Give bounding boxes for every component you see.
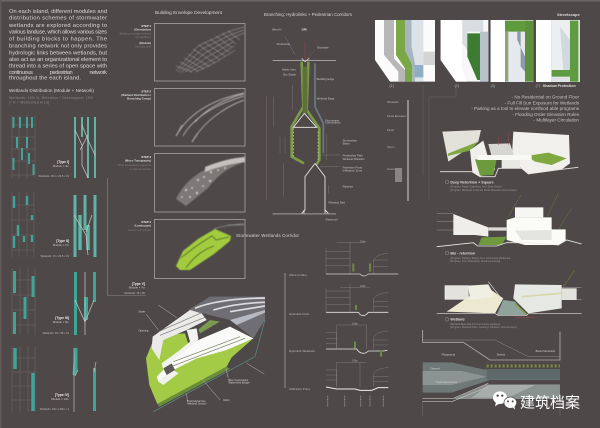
section: bio-retention [437,193,582,263]
intro text block [8,9,107,82]
iso labels: Rain [223,398,230,402]
section key rail [285,273,315,391]
step 4 label: STEP 4 [141,220,151,224]
type II caption: [Type II] [56,239,69,243]
step 1 label: the landform [135,35,152,39]
design rules list: - Multilayer Circulation [534,118,579,122]
heading: branching hydrolinks: Branching: Hydrolinks + Pedestrian Corridors [264,12,353,17]
section: deep retention + square [440,130,578,192]
caption: [Wetland Bank Site For Community Gardens] [450,323,500,326]
type IV module grid [12,346,35,412]
panel: envelope step 3 [118,154,245,212]
panel: wetlands type I [12,115,95,178]
type II caption: Module × 7m [53,243,70,247]
streetscape labels [389,84,576,88]
isometric building view [138,297,265,412]
step 2 label: STEP 2 [141,90,151,94]
site outline [147,297,265,412]
scale labels: Flood Elevated [387,114,406,118]
section row 1 [326,240,398,276]
type IV caption [40,393,70,411]
corridor labels: Pedestrian [277,42,291,46]
sections on right [437,130,582,263]
panel: envelope step 2 [121,88,245,146]
heading: wetlands distribution [9,88,94,104]
intro text block: continuous pedestrian network [9,70,107,76]
streetscape panels [375,20,580,88]
corridor labels: Bio Swale [283,73,296,77]
step 3 label: to light and water [130,167,151,171]
type I module grid [12,115,35,178]
caption: Wetland [450,318,464,322]
flood plan diagram [422,330,560,416]
streetscape labels: (7) [536,84,540,88]
streetscape labels: (2) [455,84,459,88]
step 1 label: Building envelope follows [120,32,152,36]
step 2 label: (Wetland Distribution / [121,93,151,97]
intro text block: branching network not only provides [9,43,107,49]
intro text block: On each island, different modules and [9,9,107,15]
rail labels: Wind corridor [289,273,307,277]
section row 4: 0.5m [352,359,359,363]
callout arrows [146,305,264,402]
heading: wetlands distribution: Wetlands Distribution (Module + Network) [9,88,94,93]
streetscape image 3 [491,20,533,82]
caption: Bio - retention [450,251,475,255]
corridor labels: Bioswale [317,46,329,50]
white building bars [152,310,253,385]
iso labels: Wetland Section [187,402,207,406]
iso labels: Solar [138,309,145,313]
corridor labels: Basin [343,141,350,145]
scale labels [387,100,406,171]
type I caption: Wetlands: 15m x 23.5 x 15 [38,174,70,178]
watermark: wechat icon [493,391,517,410]
intro text block: throughout the each island. [9,76,81,82]
wetland section [437,270,582,329]
type II caption [40,239,70,258]
corridor labels: Wind In [272,28,282,32]
corridor labels [272,28,365,222]
design rules list: - Full Fill Sun Exposure for Wetlands [505,100,580,106]
type IV caption: Module × 13m [51,397,70,401]
corridor sections [326,240,398,407]
caption: [Program: Wetlands & Streets Flood Retention Ground plan] [450,189,517,192]
caption: [Program: Wetland Plant, Learning, Filtration, Ground Layer] [450,326,517,329]
corridor labels: Building Edge [317,77,335,81]
intro text block: various landuse, which allows various sizes [9,30,107,36]
streetscape labels: (3) [491,84,495,88]
caption: Deep Retention + Square [450,180,494,184]
site lines [273,61,336,214]
step 3 perforated roof [176,157,245,206]
step 1 label: (Orientation) [134,28,151,32]
step 2 frame [154,88,245,146]
section: wetland + plan [422,270,582,416]
type IV caption: Wetlands: 18m x 28m x 4 [40,407,70,411]
type I caption [38,160,70,178]
type I caption: Module × 4m [53,164,70,168]
streetscape image 2 [441,20,488,82]
step 4 label: Green roof system [128,228,152,232]
corridor labels: Pedestrian Path [343,154,363,158]
corridor labels: Infiltration Zone [343,169,363,173]
flood plan diagram: Hydrological Zone [436,380,458,384]
type I network [75,117,95,178]
step 1 label [120,24,152,48]
type III caption [43,316,70,335]
corridor labels: Stormwater [325,118,340,122]
caption: [Program: Retail, Gathering, Ped. Deep Water] [450,186,502,189]
flood plan diagram: Bank Ownership [536,349,556,353]
iso labels: Blue Corporation [228,378,249,382]
type II network [74,195,95,257]
watermark text: 建筑档案 [520,394,580,412]
type III caption: Wetlands: 18 x 58 x 10 [43,331,70,335]
water line [315,63,323,153]
step 4 green roof [176,224,244,270]
step 1 mesh roof [176,27,244,72]
design rules list: - Parking as a tool to elevate nonflood able programs [471,106,580,111]
design rules list: - No Residential on Ground Floor [512,94,579,100]
rail labels [289,273,315,391]
step 4 frame [154,220,245,278]
caption [445,251,511,263]
step 3 frame [154,154,245,212]
intro text block: distribution schemes of stormwater [9,16,107,22]
branching corridor diagram [267,28,365,222]
panel: envelope step 1 [120,24,245,81]
caption: [Program: Ped. Pedestrian, Flooding Ground] [450,260,500,263]
design rules list [471,94,580,122]
rail labels: Infiltration Point [289,387,310,391]
caption [445,317,517,329]
rail labels: Hydrolink Wetlands [289,349,315,353]
panel: type V frame and caption: [Type V] [132,282,145,286]
iso labels: Opening [138,329,149,333]
panel: wetlands type IV [12,346,96,412]
intro text block: also act as an organizational element to [9,57,107,63]
corridor labels: Conveyance [325,120,341,124]
intro text block: wetlands are explored according to [8,23,107,29]
step 1 label: (Module) [139,41,151,45]
streetscape image 4 [536,20,580,82]
step 1 label: STEP 1 [141,24,151,28]
panel: wetlands type III [12,268,94,335]
type IV network [74,348,96,412]
caption [445,180,517,192]
corridor labels: DRI [302,28,307,32]
panel: envelope step 4 [128,220,245,278]
elevation scale strip [387,100,408,201]
step 1 frame [154,24,245,81]
scale labels: Storm [387,145,395,149]
section row 3 [326,321,388,357]
type IV caption: [Type IV] [55,393,69,397]
design rules list: - Flooding Order Elevation Rules [512,112,580,117]
scale labels: Wetlands [387,100,399,104]
intro text block: thread into a series of open space with [9,63,107,69]
type III module grid [12,268,35,335]
section row 2 [326,283,388,316]
streetscape labels: Shadow Protection [543,84,576,88]
iso labels [138,309,250,406]
corridor labels: Riparian [343,184,354,188]
corridor labels: Reservoir [326,218,338,222]
corridor labels: Wetland Filtration [343,157,365,161]
green corridor [292,62,319,165]
heading: wetlands distribution: Wetlands: 15% N. Retention / Greenspace: 15% [9,96,93,100]
step 3 label [118,155,152,171]
step 2 label: Branching Group) [127,96,151,100]
panel: type V frame and caption: Module × 7m [129,286,146,290]
type II caption: Wetlands: 15 x 23.5 x 15 [40,254,70,258]
section row 2: 0.5m [360,284,367,288]
step 3 label: Roof topography responds [118,163,152,167]
type II module grid [12,192,34,257]
streetscape image 1 [375,20,435,82]
type III caption: [Type III] [55,316,69,320]
streetscape labels: (1) [389,84,394,88]
step 2 label [121,90,151,100]
iso labels: Watershed Bridge [228,381,250,385]
corridor labels: Wetland Edge [317,96,335,100]
iso labels: Hydrodynamics [187,399,206,403]
section row 4 [326,359,388,407]
rail labels: Hydrolink Point [289,312,309,316]
intro text block: hydrologic links between wetlands, but [9,50,107,56]
scale labels: Flood [387,128,394,132]
step 1 label: Modular grid [135,44,151,48]
panel: type V frame and caption: Wetlands: 18 x 50 [124,291,146,295]
panel: type V frame and caption [108,178,146,296]
caption: [Program: Parking, Eating, Ped. Community Wetlands] [450,257,511,260]
heading: wetlands distribution: [* N = Watershed Area] [9,100,49,104]
flood plan diagram: Channel [430,366,440,370]
type III caption: Module × 9m [53,320,70,324]
corridor labels: Water Inlet [282,68,296,72]
intro text block: of building blocks to happen. The [9,37,107,43]
step 3 label: (Micro Topography) [125,158,151,162]
step 4 label [128,220,152,232]
corridor labels: Stormwater [343,139,357,143]
heading: building envelope development: Building Envelope Development [155,10,223,16]
step 3 label: STEP 3 [141,155,151,159]
section row 1: 0.5m [360,240,367,244]
flood plan diagram: Streets [497,352,506,356]
red arrows [305,42,315,60]
connector lines [423,85,456,200]
type I caption: [Type I] [57,160,69,164]
step 2 branching lines [176,93,244,142]
type III network [75,272,94,335]
flood plan diagram: Playground [442,352,456,356]
corridor labels: Retention Pond [343,165,363,169]
green ground plane [146,333,253,404]
scale labels: Ground [387,167,397,171]
dimension rules [267,85,340,200]
heading: streetscape: Streetscape [557,12,580,17]
glass roof behind [188,297,265,338]
corridor labels: Filtration Bed [328,200,345,204]
panel: wetlands type II [12,192,95,258]
heading: stormwater wetlands corridor: Stormwater Wetlands Corridor [236,233,300,238]
section row 3: 0.5m [352,321,359,325]
step 4 label: (Landscape) [135,224,151,228]
white branch path [293,113,328,213]
